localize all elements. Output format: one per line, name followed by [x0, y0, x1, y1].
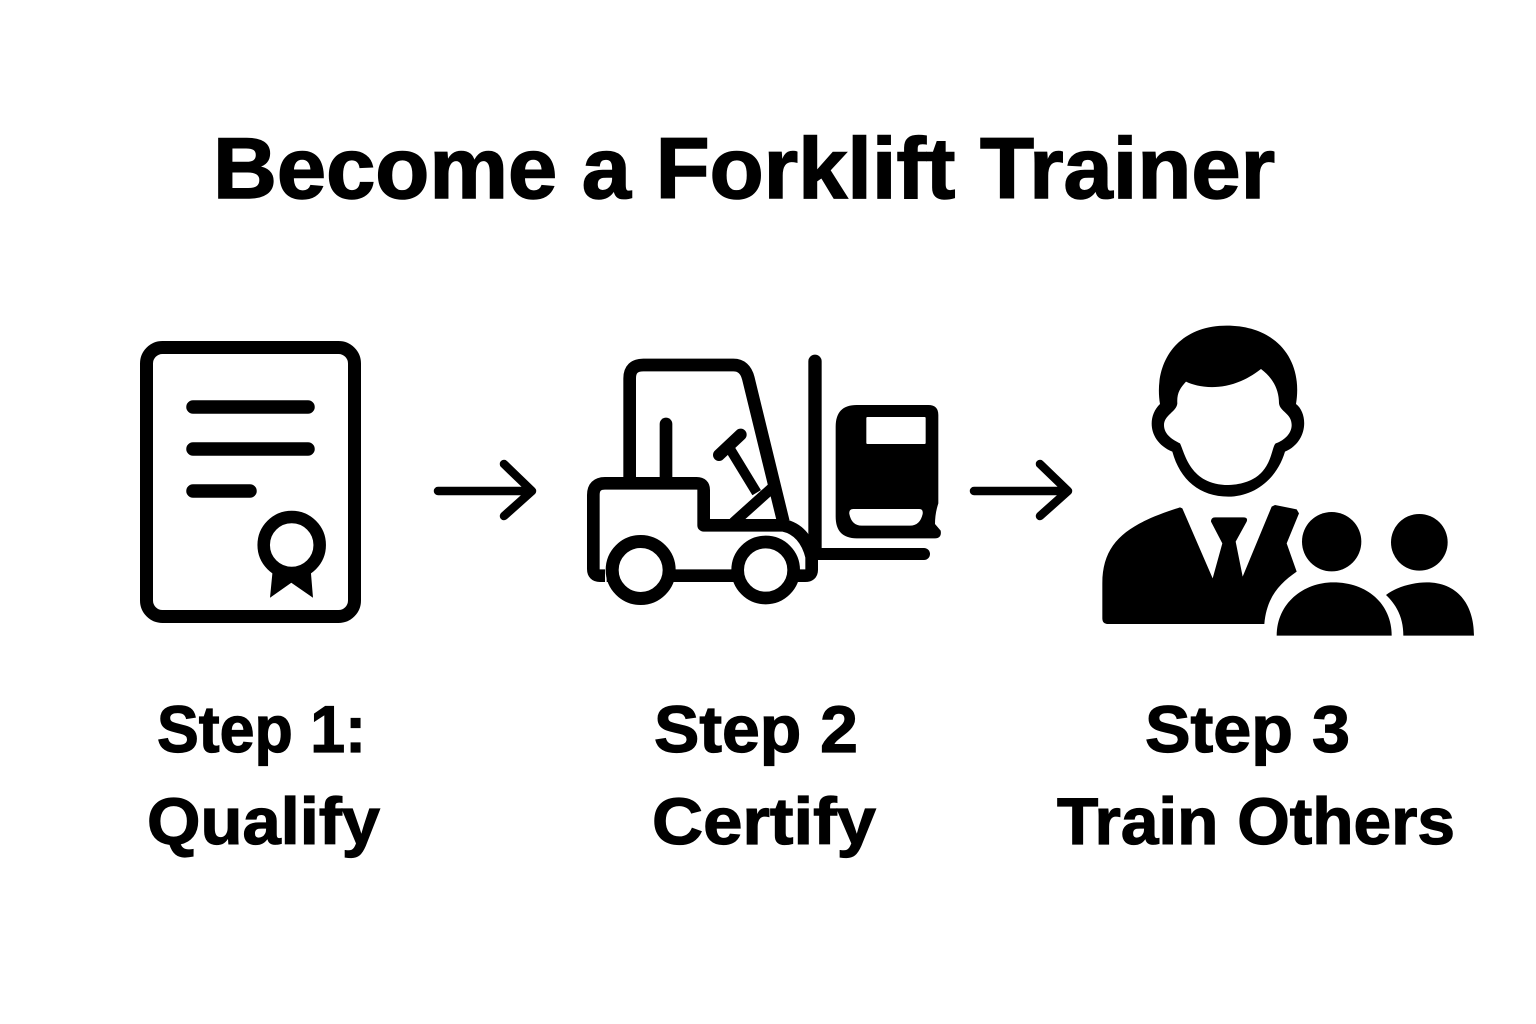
label: step 2 — [652, 692, 876, 858]
label: step 1: Step 1: — [157, 692, 366, 766]
label: step 1 — [147, 692, 380, 858]
icon: certificate document — [146, 348, 354, 616]
label: step 3 — [1057, 692, 1455, 858]
arrow: step 1 to step 2 — [438, 464, 532, 516]
title: Become a Forklift Trainer — [213, 121, 1275, 217]
label: step 1: Qualify — [147, 784, 380, 858]
arrow: step 2 to step 3 — [974, 464, 1068, 516]
label: step 2: Step 2 — [654, 692, 858, 766]
label: step 3: Step 3 — [1145, 692, 1350, 766]
icon: forklift with load — [593, 361, 941, 598]
label: step 2: Certify — [652, 784, 876, 858]
label: step 3: Train Others — [1057, 784, 1455, 858]
icon: trainer with group — [1102, 326, 1474, 636]
